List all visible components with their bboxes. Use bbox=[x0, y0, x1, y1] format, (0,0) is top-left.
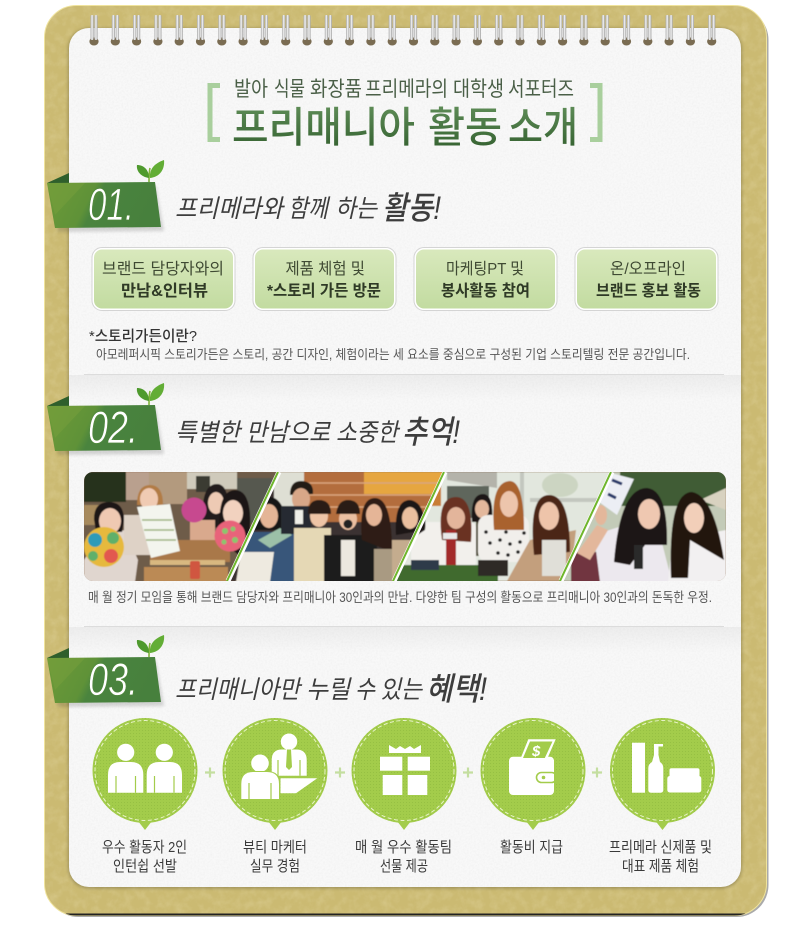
label: 뷰티 마케터 bbox=[243, 839, 307, 856]
main title bbox=[232, 104, 578, 151]
subtitle bbox=[234, 78, 574, 101]
activity button 1: 브랜드 담당자와의 bbox=[102, 260, 224, 278]
benefit 3: gift bbox=[352, 718, 456, 875]
benefit 1: internship bbox=[92, 718, 198, 875]
activity button 2: *스토리 가든 방문 bbox=[267, 282, 381, 300]
main title: 소개 bbox=[508, 104, 578, 151]
section 3 heading: 혜택! bbox=[426, 671, 487, 707]
section 1 heading bbox=[175, 190, 441, 226]
section 3 heading: 있는 bbox=[380, 676, 424, 704]
section 1 heading: 함께 bbox=[288, 195, 331, 223]
right bracket bbox=[590, 86, 600, 140]
activity button 3 bbox=[414, 248, 557, 310]
section 3 ribbon bbox=[47, 635, 164, 707]
label: 우수 활동자 2인 bbox=[102, 839, 187, 856]
photo 4: two friends outdoors bbox=[561, 472, 726, 582]
subtitle: 발아 bbox=[234, 78, 268, 101]
section 1 heading: 프리메라와 bbox=[175, 195, 286, 223]
section 2 ribbon bbox=[47, 383, 164, 455]
benefit 2: beauty marketer: 실무 경험 bbox=[250, 858, 300, 875]
section 3 heading bbox=[175, 671, 487, 707]
activity button 2: 제품 체험 및 bbox=[286, 260, 365, 278]
subtitle: 대학생 bbox=[453, 78, 504, 101]
story garden note bbox=[89, 328, 690, 362]
section 3 heading: 누릴 bbox=[306, 676, 352, 704]
section 1 ribbon: 01. bbox=[88, 179, 134, 230]
section 3 heading: 프리매니아만 bbox=[175, 676, 303, 704]
label: 매 월 우수 활동팀 bbox=[355, 839, 452, 856]
section 1 heading: 하는 bbox=[335, 195, 379, 223]
icon: marketer at desk bbox=[222, 718, 328, 830]
icon: two people bbox=[92, 718, 198, 830]
spiral binding rings bbox=[89, 15, 716, 46]
plus sign 3 bbox=[463, 768, 473, 778]
slanted dividers bbox=[228, 472, 279, 581]
section 2 heading: 추억! bbox=[402, 414, 460, 450]
section 2 ribbon: 02. bbox=[88, 402, 138, 453]
activity button 4: 브랜드 홍보 활동 bbox=[596, 282, 701, 300]
title block bbox=[210, 78, 600, 151]
plus sign 2 bbox=[335, 768, 345, 778]
photo 3: plant workshop bbox=[394, 472, 612, 582]
plus sign 4 bbox=[592, 768, 602, 778]
icon: cosmetics bbox=[610, 718, 715, 830]
main title: 활동 bbox=[428, 104, 502, 151]
section 2 heading: 만남으로 bbox=[246, 419, 331, 447]
photo 2: brick wall group bbox=[228, 472, 445, 582]
benefit 2: beauty marketer bbox=[222, 718, 328, 875]
activity button 2 bbox=[253, 248, 396, 310]
activity button 3: 마케팅PT 및 bbox=[446, 260, 524, 278]
main title: 프리매니아 bbox=[232, 104, 415, 151]
photo caption: 매 월 정기 모임을 통해 브랜드 담당자와 프리매니아 30인과의 만남. 다양한 팀 구성의 활동으로 프리매니아 30인과의 돈독한 우정. bbox=[88, 590, 712, 605]
icon: wallet: $ bbox=[531, 743, 541, 760]
activity button 4 bbox=[575, 248, 718, 310]
left bracket bbox=[210, 86, 220, 140]
notebook paper bbox=[68, 28, 742, 888]
story garden note: *스토리가든이란? bbox=[89, 328, 197, 345]
activity button 1: 만남&인터뷰 bbox=[121, 282, 208, 300]
section 2 heading: 소중한 bbox=[336, 419, 401, 447]
label: 활동비 지급 bbox=[500, 839, 563, 856]
subtitle: 화장품 bbox=[310, 78, 362, 101]
label: 프리메라 신제품 및 bbox=[609, 839, 712, 856]
icon: gift box bbox=[352, 718, 456, 830]
section 1 ribbon bbox=[47, 160, 164, 232]
benefit 5: product trial bbox=[609, 718, 715, 875]
story garden note: 아모레퍼시픽 스토리가든은 스토리, 공간 디자인, 체험이라는 세 요소를 중심으로 구성된 기업 스토리텔링 전문 공간입니다. bbox=[96, 347, 690, 362]
activity button 4: 온/오프라인 bbox=[610, 260, 686, 278]
photo 1: cafe meeting bbox=[84, 472, 279, 582]
subtitle: 프리메라의 bbox=[365, 78, 448, 101]
benefit 4: activity funds bbox=[480, 718, 586, 856]
photo strip bbox=[84, 472, 726, 582]
section 2 heading: 특별한 bbox=[175, 419, 243, 447]
subtitle: 식물 bbox=[274, 78, 305, 101]
subtitle: 서포터즈 bbox=[508, 78, 574, 101]
benefit 1: internship: 인턴쉽 선발 bbox=[113, 858, 177, 875]
activity button 3: 봉사활동 참여 bbox=[441, 282, 530, 300]
benefit 3: gift: 선물 제공 bbox=[380, 858, 428, 875]
section 3 heading: 수 bbox=[355, 676, 376, 704]
plus sign 1 bbox=[205, 768, 215, 778]
section 2 heading bbox=[175, 414, 460, 450]
section 3 ribbon: 03. bbox=[88, 654, 138, 705]
activity button 1 bbox=[92, 248, 235, 310]
section 1 heading: 활동! bbox=[382, 190, 441, 226]
benefit 5: product trial: 대표 제품 체험 bbox=[622, 858, 699, 875]
